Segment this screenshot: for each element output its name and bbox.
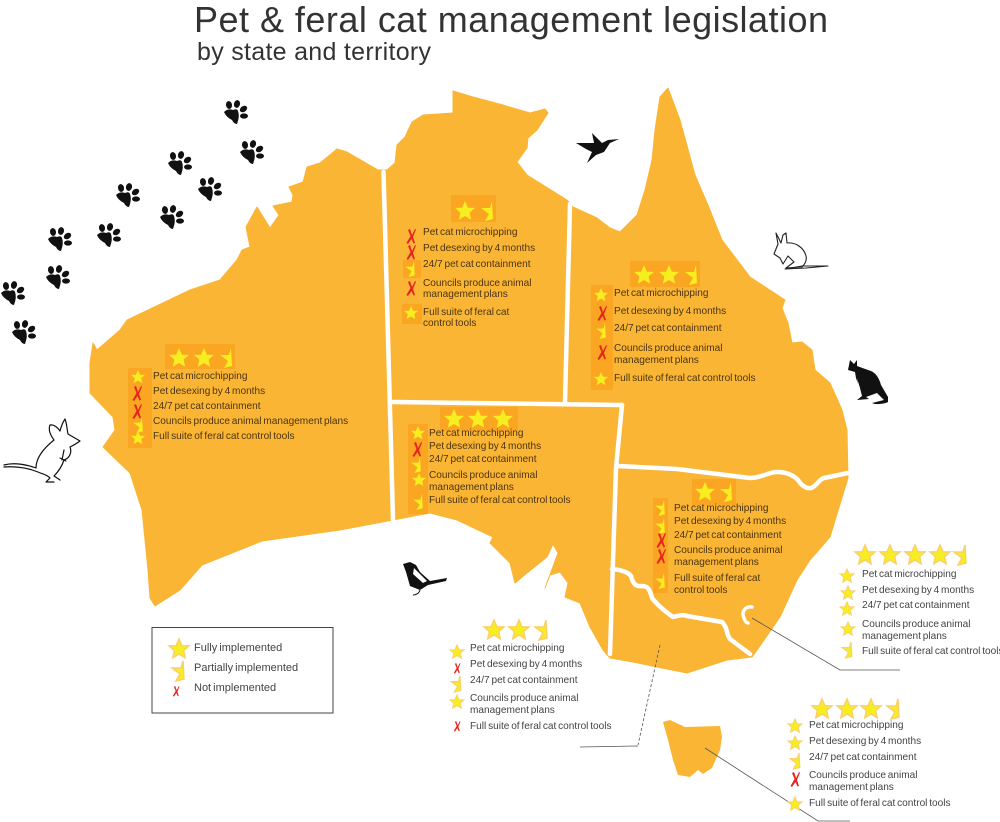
panel: Australian Capital Territory	[840, 545, 1000, 658]
panel: Northern Territory: management plans	[423, 289, 508, 300]
panel: South Australia: 24/7 pet cat containment	[429, 454, 537, 465]
panel: Tasmania: management plans	[809, 782, 894, 793]
panel: Northern Territory: Full suite of feral cat	[423, 307, 510, 318]
icon: bilby	[774, 233, 828, 269]
panel: Victoria: Full suite of feral cat control tools	[470, 721, 612, 732]
icon: kangaroo	[848, 360, 888, 404]
title: Pet & feral cat management legislation	[194, 0, 828, 40]
panel: Victoria	[450, 620, 612, 732]
icon: numbat	[4, 419, 80, 482]
panel: South Australia: management plans	[429, 482, 514, 493]
panel: Northern Territory: Pet cat microchipping	[423, 227, 518, 238]
panel: Queensland: Pet desexing by 4 months	[614, 306, 726, 317]
panel: Western Australia: Pet desexing by 4 months	[153, 386, 265, 397]
panel: Western Australia: Pet cat microchipping	[153, 371, 248, 382]
island: Tasmania	[663, 720, 722, 777]
map of Australia	[90, 88, 848, 673]
panel: Victoria: Pet desexing by 4 months	[470, 659, 582, 670]
panel: Victoria: Councils produce animal	[470, 693, 579, 704]
panel: Australian Capital Territory: Councils produce animal	[862, 619, 971, 630]
panel: Victoria: 24/7 pet cat containment	[470, 675, 578, 686]
state borders	[384, 172, 848, 654]
panel: Queensland	[591, 261, 756, 390]
panel: New South Wales: 24/7 pet cat containment	[674, 530, 782, 541]
panel: Australian Capital Territory: Full suite of feral cat control tools	[862, 646, 1000, 657]
panel: Queensland: 24/7 pet cat containment	[614, 323, 722, 334]
panel: Western Australia: 24/7 pet cat containment	[153, 401, 261, 412]
panel: Northern Territory	[402, 195, 535, 329]
legend: Fully implemented	[194, 642, 282, 654]
panel: South Australia: Councils produce animal	[429, 470, 538, 481]
panel: South Australia: Pet cat microchipping	[429, 428, 524, 439]
title	[194, 0, 828, 66]
panel: Queensland: Councils produce animal	[614, 343, 723, 354]
panel: Tasmania	[788, 699, 951, 810]
panel: Western Australia: Full suite of feral cat control tools	[153, 431, 295, 442]
leader lines	[580, 618, 900, 821]
paw prints	[1, 99, 264, 344]
legend: Not implemented	[194, 682, 276, 694]
panel: Tasmania: 24/7 pet cat containment	[809, 752, 917, 763]
panel: Queensland: Full suite of feral cat control tools	[614, 373, 756, 384]
panel: Australian Capital Territory: 24/7 pet cat containment	[862, 600, 970, 611]
panel: Tasmania: Full suite of feral cat control tools	[809, 798, 951, 809]
legend: Partially implemented	[194, 662, 298, 674]
panel: Australian Capital Territory: Pet cat microchipping	[862, 569, 956, 580]
panel: New South Wales: management plans	[674, 557, 759, 568]
panel: New South Wales: Councils produce animal	[674, 545, 783, 556]
panel: Tasmania: Pet cat microchipping	[809, 720, 904, 731]
panel: South Australia: Full suite of feral cat control tools	[429, 495, 571, 506]
panel: Australian Capital Territory: Pet desexing by 4 months	[862, 585, 974, 596]
panel: Queensland: Pet cat microchipping	[614, 288, 708, 299]
panel: Victoria: Pet cat microchipping	[470, 643, 564, 654]
panel: New South Wales: control tools	[674, 585, 727, 596]
panel: Northern Territory: Councils produce animal	[423, 278, 532, 289]
icon: hummingbird	[576, 133, 619, 163]
panel: South Australia: Pet desexing by 4 months	[429, 441, 541, 452]
legend	[152, 628, 333, 713]
panel: Northern Territory: Pet desexing by 4 months	[423, 243, 535, 254]
panel: Australian Capital Territory: management plans	[862, 631, 947, 642]
panel: New South Wales: Pet cat microchipping	[674, 503, 768, 514]
panel: Western Australia	[128, 344, 348, 448]
title: by state and territory	[197, 38, 432, 66]
panel: Queensland: management plans	[614, 355, 699, 366]
panel: Western Australia: Councils produce animal management plans	[153, 416, 348, 427]
panel: Northern Territory: control tools	[423, 318, 476, 329]
panel: New South Wales: Full suite of feral cat	[674, 573, 761, 584]
panel: Northern Territory: 24/7 pet cat containment	[423, 259, 531, 270]
panel: Tasmania: Pet desexing by 4 months	[809, 736, 921, 747]
panel: Victoria: management plans	[470, 705, 555, 716]
panel: New South Wales: Pet desexing by 4 months	[674, 516, 786, 527]
icon: magpie	[403, 562, 447, 595]
panel: New South Wales	[653, 479, 786, 596]
panel: South Australia	[408, 407, 571, 514]
panel: Tasmania: Councils produce animal	[809, 770, 918, 781]
